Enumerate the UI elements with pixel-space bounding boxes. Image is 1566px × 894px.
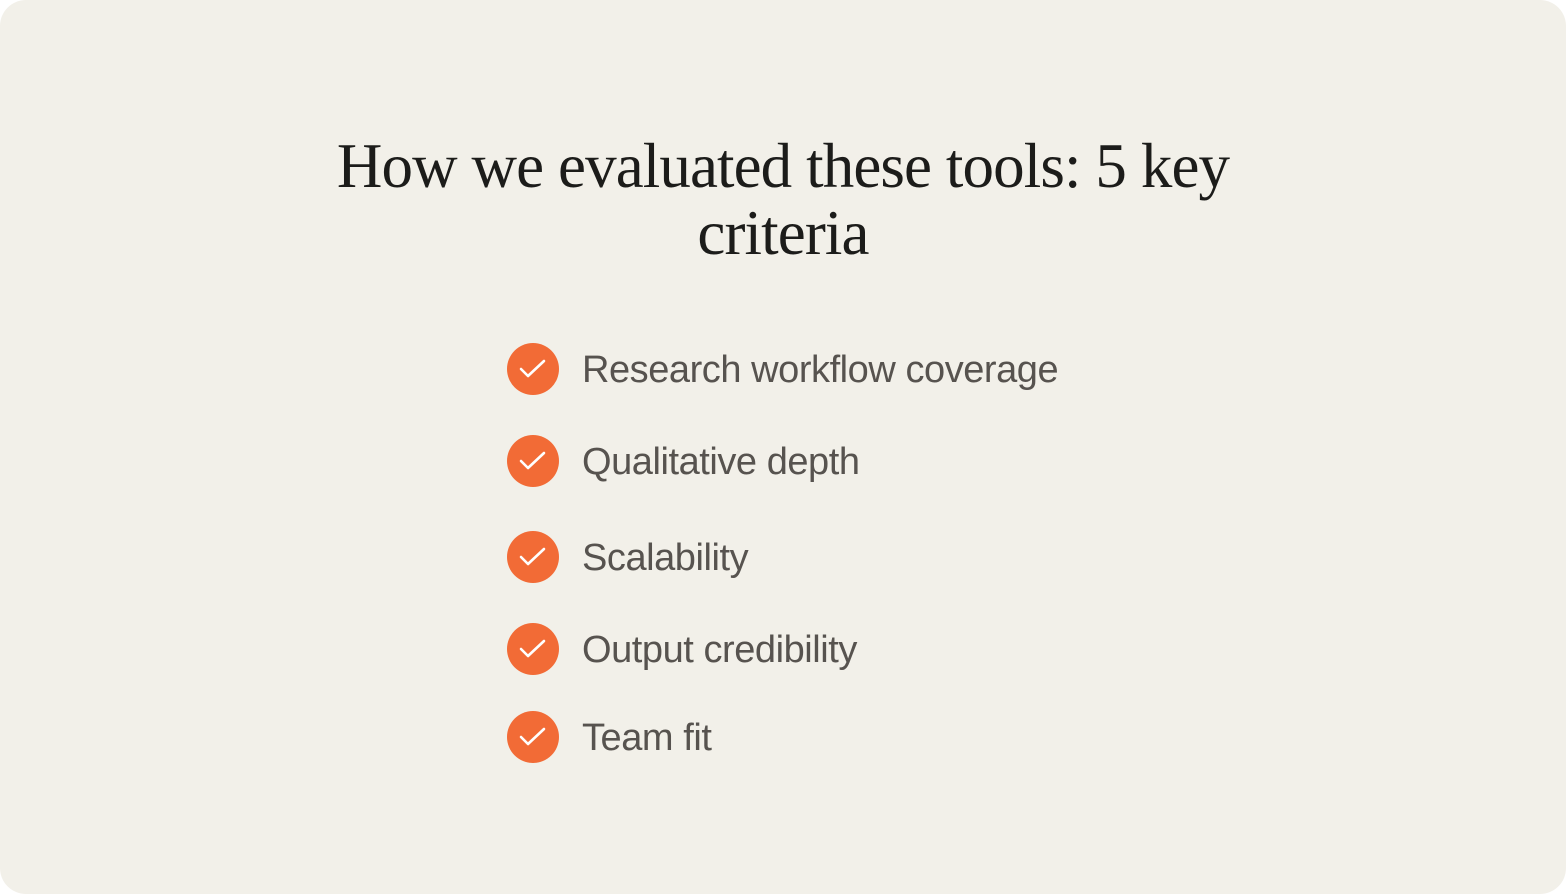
- title: How we evaluated these tools: 5 key: [337, 131, 1229, 201]
- label: Research workflow coverage: [582, 349, 1058, 391]
- title: [337, 131, 1230, 268]
- label: Output credibility: [582, 629, 857, 671]
- criterion 2: [507, 435, 860, 487]
- title: criteria: [697, 198, 869, 268]
- criterion 1: [507, 343, 1058, 395]
- icon: check: [507, 343, 559, 395]
- icon: check: [507, 711, 559, 763]
- label: Scalability: [582, 537, 748, 579]
- criterion 5: [507, 711, 712, 763]
- criterion 4: [507, 623, 858, 675]
- icon: check: [507, 623, 559, 675]
- label: Team fit: [582, 717, 711, 759]
- label: Qualitative depth: [582, 441, 860, 483]
- criterion 3: [507, 531, 748, 583]
- icon: check: [507, 531, 559, 583]
- icon: check: [507, 435, 559, 487]
